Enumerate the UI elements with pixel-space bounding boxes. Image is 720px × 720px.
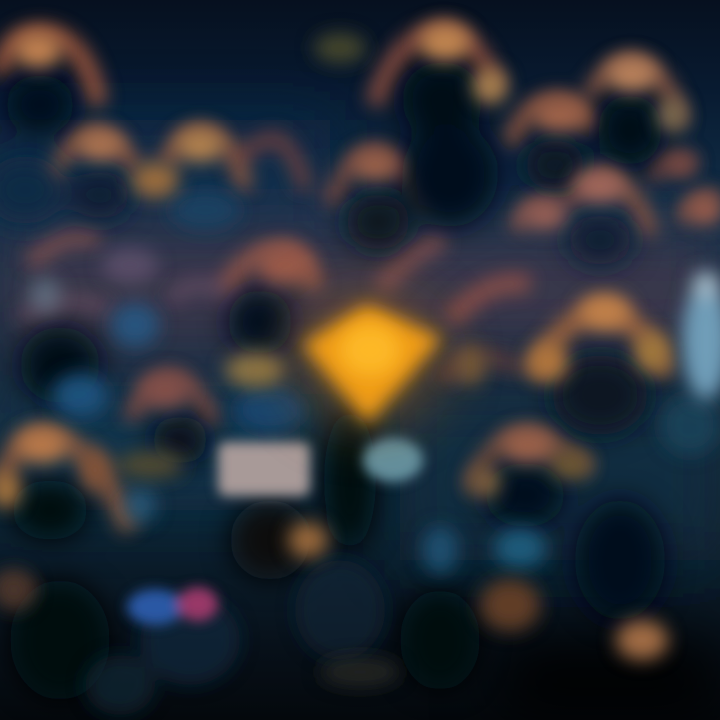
light-blue figure at right edge (682, 271, 720, 400)
pale blue and white patches (127, 438, 423, 625)
crowd: blue highlights (29, 190, 720, 715)
diamond (302, 304, 442, 424)
crowd: warm hair and shoulders (0, 30, 720, 600)
diamond highlight (340, 324, 400, 376)
glowing yellow diamond (293, 295, 443, 425)
diamond glow (293, 295, 443, 425)
